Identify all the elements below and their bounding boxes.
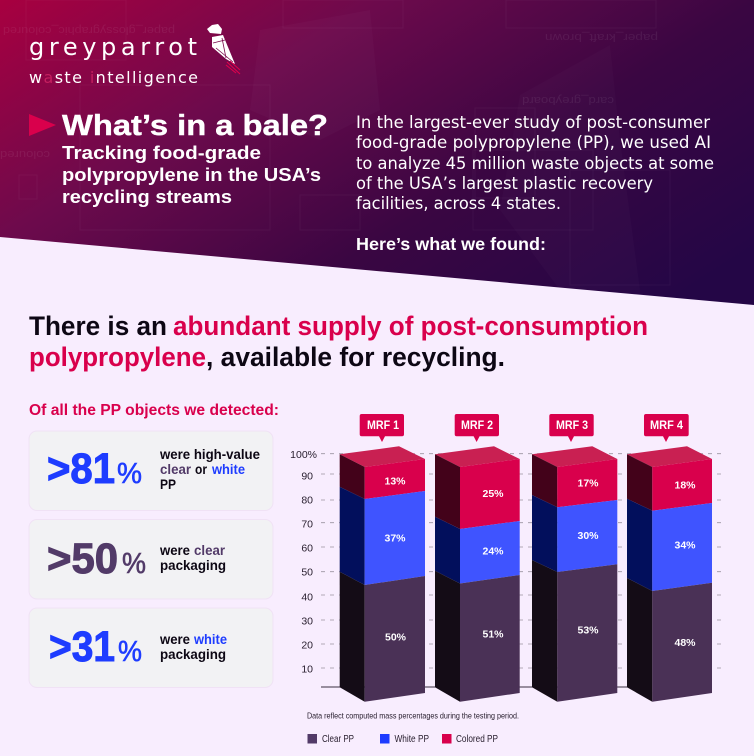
y axis labels: 90 <box>301 470 313 482</box>
label: MRF 3: MRF 3 <box>556 420 588 432</box>
panel: stat 50%: clear <box>194 542 226 558</box>
bar: MRF 4: 48% <box>674 637 696 649</box>
title block <box>62 110 328 207</box>
intro paragraph: facilities, across 4 states. <box>356 194 561 213</box>
y axis labels: 70 <box>301 518 313 530</box>
wordmark: greyparrot <box>29 33 197 61</box>
subtitle: recycling streams <box>62 187 232 207</box>
label: MRF 2 <box>455 414 499 442</box>
faint detection labels: coloured <box>0 148 50 160</box>
bar: MRF 4 <box>627 446 712 702</box>
icon: title arrow <box>29 114 56 136</box>
faint detection labels: card_greyboard <box>522 94 614 106</box>
intro paragraph: In the largest-ever study of post-consumer <box>356 113 710 132</box>
bar: MRF 2: 25% <box>482 488 504 500</box>
faint detection labels: paper_glossygraphic_coloured <box>3 24 175 36</box>
intro paragraph: food-grade polypropylene (PP), we used AI <box>356 133 711 152</box>
y axis labels <box>290 449 317 676</box>
label: MRF 3 <box>549 414 594 442</box>
panel: stat 31%: packaging <box>160 646 226 662</box>
subtitle: polypropylene in the USA’s <box>62 165 321 185</box>
bar: MRF 4: 34% <box>674 540 696 552</box>
panel: stat 50%: % <box>122 548 146 580</box>
title: What’s in a bale? <box>62 110 328 142</box>
stacked bar chart <box>290 414 723 702</box>
y axis labels: 30 <box>301 616 313 628</box>
callout: here's what we found: Here’s what we found: <box>356 234 546 254</box>
y axis labels: 40 <box>301 592 313 604</box>
intro paragraph <box>356 113 714 213</box>
panel: stat 81%: PP <box>160 476 176 492</box>
panel: stat 31%: were <box>159 631 190 647</box>
bar: MRF 2: 24% <box>482 546 504 558</box>
subtitle: Tracking food-grade <box>62 143 261 163</box>
bar: MRF 3 <box>532 446 617 702</box>
bar: MRF 3: 30% <box>577 530 599 542</box>
y axis labels: 100% <box>290 449 317 461</box>
panel: stat 50% <box>29 520 273 599</box>
panel: stat 81% <box>29 431 273 510</box>
label: MRF 4 <box>644 414 689 442</box>
y axis labels: 60 <box>301 542 313 554</box>
y axis labels: 10 <box>301 664 313 676</box>
panel: stat 31%: % <box>118 636 142 668</box>
main heading: polypropylene <box>29 342 206 372</box>
panel: stat 81%: were high-value <box>159 446 260 462</box>
y axis labels: 50 <box>301 566 313 578</box>
legend: Colored PP <box>456 734 498 745</box>
footnote: Data reflect computed mass percentages during the testing period. <box>307 710 519 720</box>
label: MRF 2: MRF 2 <box>461 420 493 432</box>
bar: MRF 1 <box>340 446 425 702</box>
panel: stat 81%: % <box>117 458 142 490</box>
bar: MRF 4: 18% <box>674 480 696 492</box>
panel: stat 50%: were <box>159 542 190 558</box>
legend <box>308 734 498 745</box>
y axis labels: 80 <box>301 494 313 506</box>
main heading: There is an <box>29 311 167 341</box>
y axis labels: 20 <box>301 640 313 652</box>
background photo texture <box>19 0 670 290</box>
bar: MRF 1: 37% <box>384 532 406 544</box>
label: MRF 4: MRF 4 <box>650 420 684 432</box>
logo: greyparrot <box>29 24 240 87</box>
main heading: abundant supply of post-consumption <box>173 311 648 341</box>
label: MRF 1 <box>360 414 404 442</box>
subtitle <box>62 143 321 207</box>
label: MRF 1: MRF 1 <box>367 420 400 432</box>
bar: MRF 2 <box>435 446 520 702</box>
intro paragraph: of the USA’s largest plastic recovery <box>356 174 653 193</box>
panel: stat 31% <box>29 608 273 688</box>
faint detection labels: paper_kraft_brown <box>545 31 658 43</box>
panel: stat 81%: white <box>211 461 245 477</box>
panel: stat 50%: >50 <box>47 536 118 583</box>
bar: MRF 3: 17% <box>577 478 599 490</box>
faint detection labels <box>0 24 658 160</box>
bar: MRF 2: 51% <box>482 628 504 640</box>
panel: stat 81%: >81 <box>47 446 115 493</box>
panel: stat 81%: or <box>195 461 207 477</box>
legend: White PP <box>394 734 429 745</box>
main heading <box>29 311 648 372</box>
panel: stat 31%: >31 <box>49 624 115 671</box>
panel: stat 31%: white <box>193 631 227 647</box>
stats heading: Of all the PP objects we detected: <box>29 402 279 419</box>
panel: stat 50%: packaging <box>160 557 226 573</box>
legend: Clear PP <box>322 734 354 745</box>
bar: MRF 3: 53% <box>577 624 599 636</box>
tagline: waste intelligence <box>29 68 198 87</box>
bar: MRF 1: 13% <box>384 476 406 488</box>
header banner <box>0 0 754 305</box>
icon: parrot <box>207 24 240 74</box>
bar: MRF 1: 50% <box>385 632 407 644</box>
main heading: , available for recycling. <box>206 342 505 372</box>
intro paragraph: to analyze 45 million waste objects at some <box>356 154 714 173</box>
panel: stat 81%: clear <box>160 461 192 477</box>
